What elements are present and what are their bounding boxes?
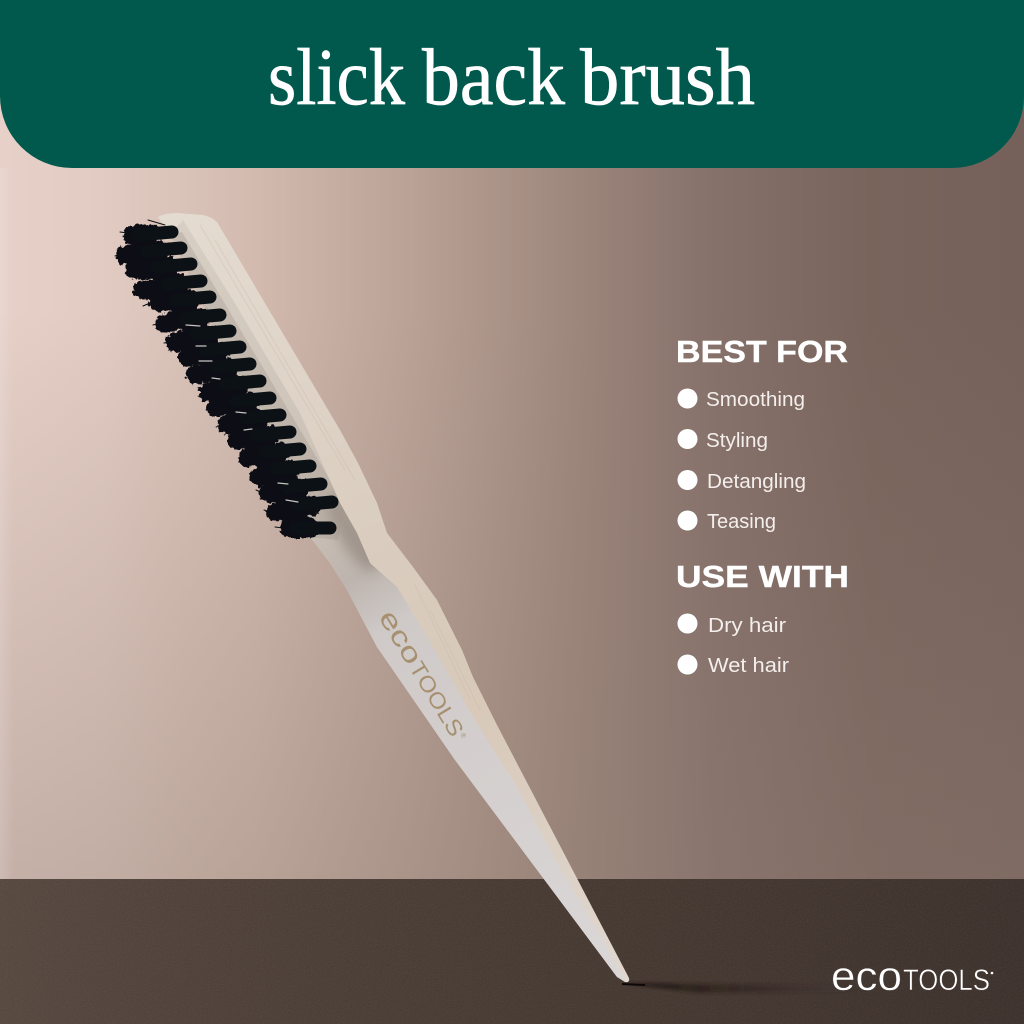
panel: best for (676, 334, 848, 533)
handle logo: ecoTOOLS: ® (458, 731, 468, 741)
bristle tips mass (125, 228, 312, 534)
brand logo: TOOLS (903, 964, 990, 997)
brush handle (158, 213, 629, 982)
item: wet hair (678, 654, 789, 677)
item: smoothing: Smoothing (706, 389, 805, 411)
item: wet hair: Wet hair (708, 655, 789, 677)
bristle highlights (186, 325, 298, 502)
stray bristle hairs (115, 220, 283, 528)
item: teasing (678, 510, 776, 533)
title: slick (268, 34, 405, 122)
heading: best for: BEST FOR (676, 334, 848, 369)
heading: use with: USE WITH (676, 559, 849, 594)
handle logo: ecoTOOLS: eco (373, 605, 429, 670)
brand logo: eco (831, 953, 902, 999)
item: styling: Styling (706, 430, 768, 452)
bristles (115, 220, 332, 534)
brush (115, 213, 629, 982)
brush shadow on floor (622, 983, 870, 993)
handle logo: ecoTOOLS: TOOLS (404, 657, 469, 741)
title (268, 34, 755, 122)
item: teasing: Teasing (707, 511, 776, 533)
title: back (422, 34, 565, 122)
item: dry hair: Dry hair (708, 615, 786, 637)
item: dry hair (678, 614, 786, 637)
item: styling (678, 429, 768, 452)
title banner (0, 0, 1024, 168)
bristle tufts (138, 232, 332, 528)
title: brush (580, 34, 755, 122)
brand logo (831, 953, 993, 999)
item: detangling: Detangling (707, 471, 806, 493)
panel: use with (676, 559, 849, 677)
handle logo: ecoTOOLS (373, 605, 476, 747)
floor surface (0, 879, 1024, 1024)
